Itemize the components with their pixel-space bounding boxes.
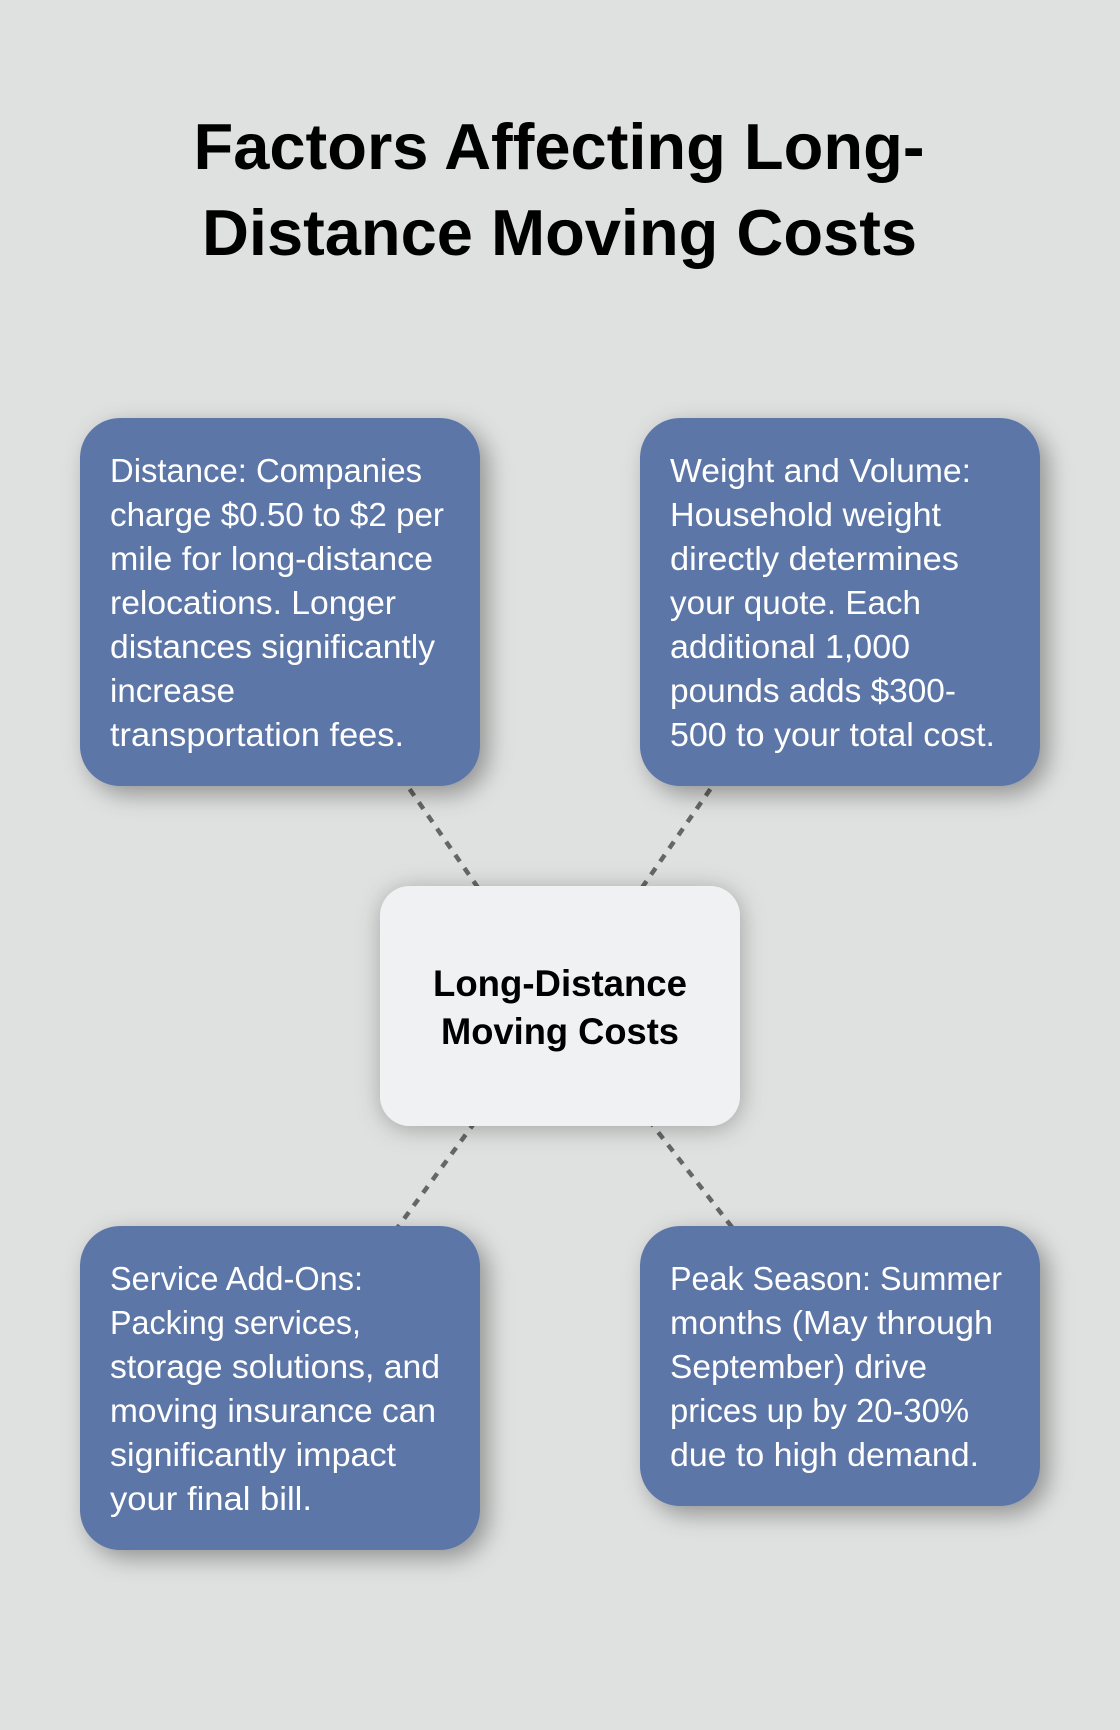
- panel: peak season: prices up by 20-30%: [670, 1392, 969, 1429]
- panel: center topic: [380, 886, 740, 1126]
- panel: peak season: months (May through: [670, 1304, 993, 1341]
- panel: distance: transportation fees.: [110, 716, 404, 753]
- panel: weight and volume: pounds adds $300-: [670, 672, 956, 709]
- panel: center topic: Long-Distance: [433, 963, 687, 1004]
- panel: distance: charge $0.50 to $2 per: [110, 496, 444, 533]
- panel: service add-ons: your final bill.: [110, 1480, 312, 1517]
- panel: center topic: Moving Costs: [441, 1011, 679, 1052]
- panel: service add-ons: [80, 1226, 480, 1550]
- panel: weight and volume: Household weight: [670, 496, 941, 533]
- connector: add-ons to center: [280, 1006, 560, 1388]
- panel: service add-ons: Service Add-Ons:: [110, 1260, 363, 1297]
- panel: peak season: Peak Season: Summer: [670, 1260, 1002, 1297]
- panel: weight and volume: additional 1,000: [670, 628, 910, 665]
- connector: peak season to center: [560, 1006, 840, 1366]
- panel: distance: Distance: Companies: [110, 452, 422, 489]
- panel: weight and volume: 500 to your total cost.: [670, 716, 995, 753]
- panel: weight and volume: Weight and Volume:: [670, 452, 971, 489]
- panel: distance: distances significantly: [110, 628, 436, 665]
- panel: distance: relocations. Longer: [110, 584, 396, 621]
- panel: weight and volume: your quote. Each: [670, 584, 921, 621]
- panel: weight and volume: [640, 418, 1040, 786]
- panel: service add-ons: moving insurance can: [110, 1392, 436, 1429]
- panel: peak season: September) drive: [670, 1348, 927, 1385]
- title: [194, 110, 925, 269]
- panel: peak season: [640, 1226, 1040, 1506]
- title: Factors Affecting Long-: [194, 110, 925, 183]
- panel: service add-ons: Packing services,: [110, 1304, 361, 1341]
- title: Distance Moving Costs: [202, 196, 917, 269]
- panel: service add-ons: significantly impact: [110, 1436, 396, 1473]
- panel: weight and volume: directly determines: [670, 540, 959, 577]
- panel: service add-ons: storage solutions, and: [110, 1348, 440, 1385]
- connector: weight to center: [560, 602, 840, 1006]
- panel: distance: increase: [110, 672, 235, 709]
- panel: distance: [80, 418, 480, 786]
- panel: distance: mile for long-distance: [110, 540, 433, 577]
- panel: peak season: due to high demand.: [670, 1436, 979, 1473]
- connector: distance to center: [280, 602, 560, 1006]
